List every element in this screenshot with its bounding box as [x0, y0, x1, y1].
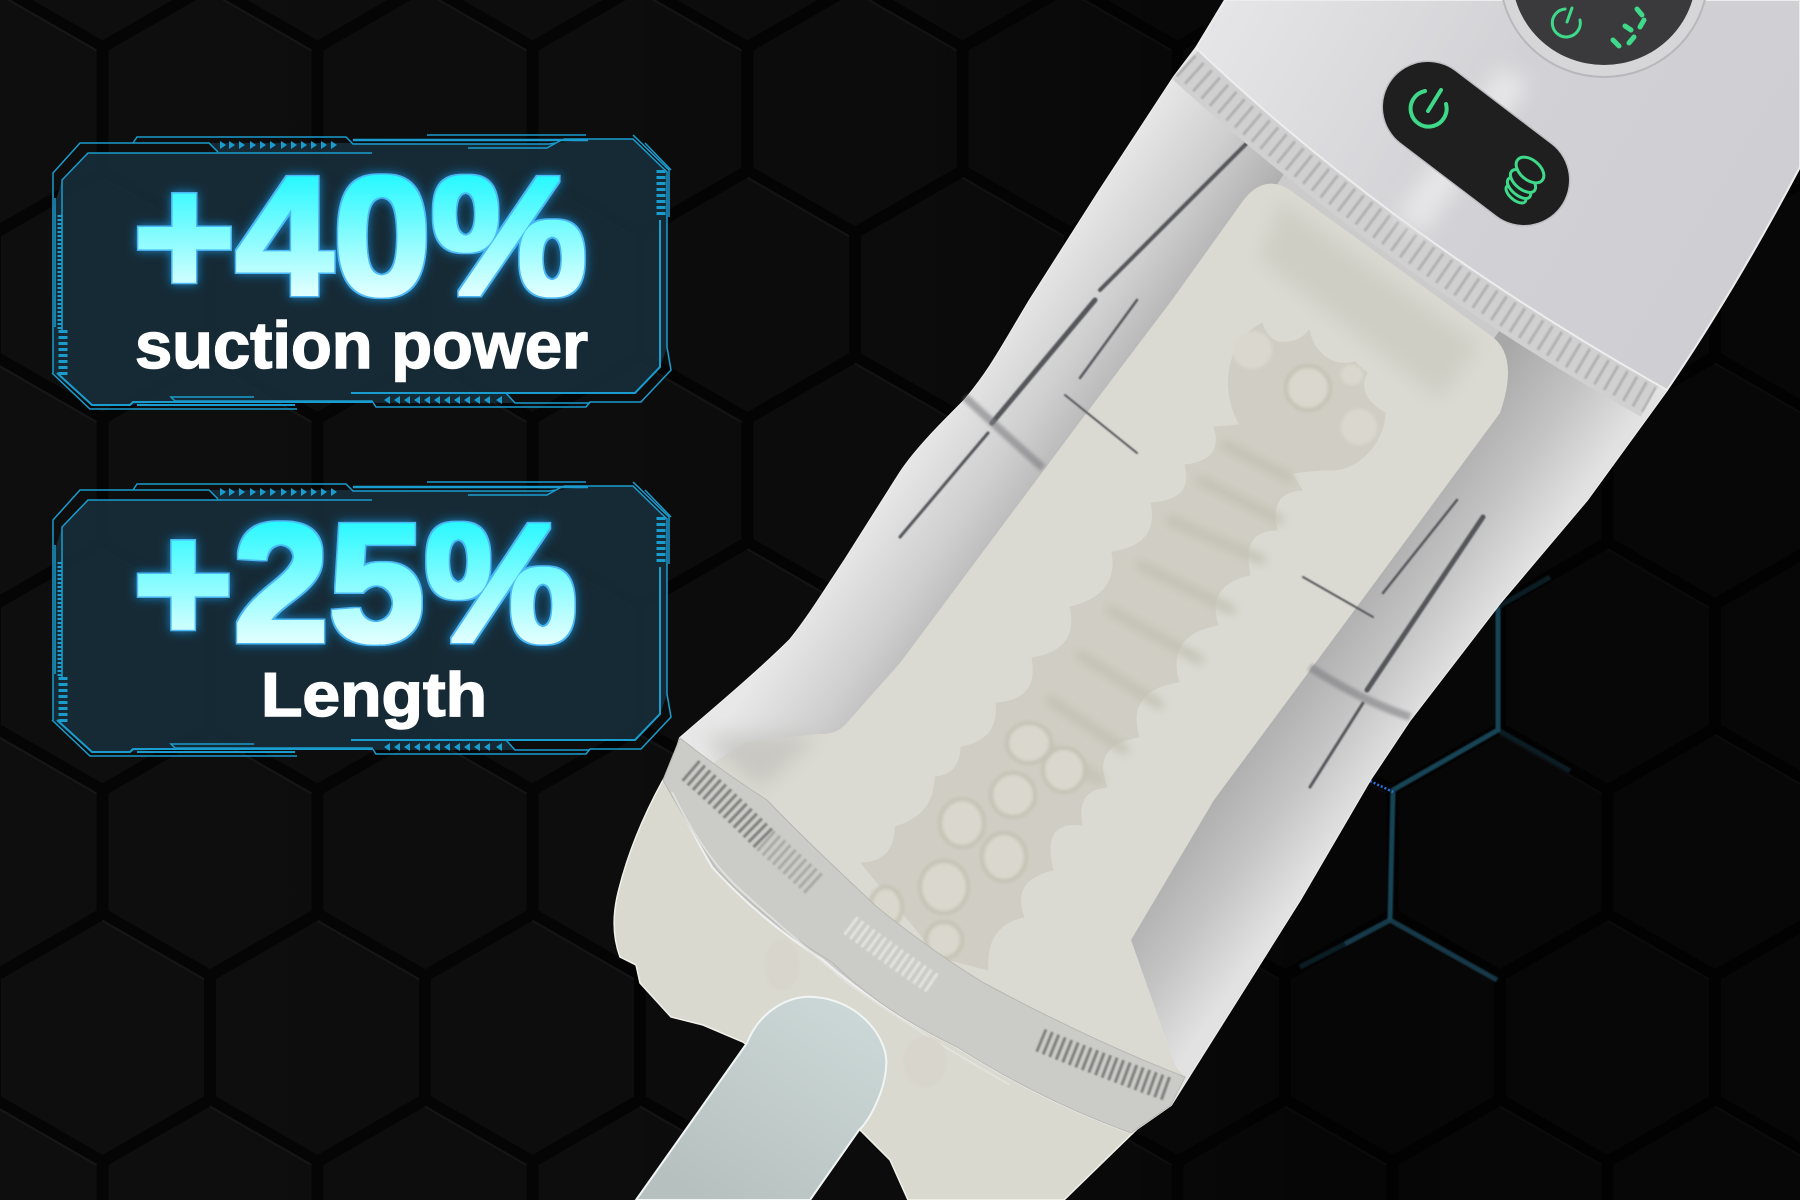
lumps around the rod — [764, 939, 947, 1088]
icon: spring coil — [1503, 152, 1549, 206]
icon: dial power — [1552, 8, 1580, 37]
dial level dashes — [1613, 9, 1644, 46]
icon: power button — [1411, 90, 1447, 127]
label: Length: Length — [261, 661, 487, 730]
lower collar ring — [663, 738, 1185, 1133]
glowing blue hexagon edges — [1300, 577, 1570, 980]
glass housing: right side — [1060, 330, 1667, 1118]
channel ribs — [1025, 445, 1290, 780]
channel dimples — [870, 331, 1377, 958]
clear rod — [636, 997, 886, 1200]
upper glass band — [1185, 65, 1650, 400]
stat: +25%: +25% — [133, 489, 577, 677]
housing base — [667, 48, 1667, 1133]
white device body — [1196, 0, 1800, 390]
bright hexagon edge spark — [1370, 781, 1393, 792]
panel: +40% suction power — [52, 135, 671, 409]
panel: +25% Length — [52, 482, 671, 756]
stat: +40%: +40% — [133, 142, 587, 330]
dial display — [1500, 0, 1708, 77]
label: suction power: suction power — [135, 308, 588, 382]
device illustration — [614, 0, 1800, 1200]
control button pill — [1411, 90, 1549, 206]
glass housing slits — [900, 143, 1483, 787]
glass housing: left side — [680, 48, 1300, 800]
textured inner channel — [861, 323, 1385, 970]
device end cap — [614, 780, 1136, 1200]
inner sleeve — [710, 184, 1508, 1077]
